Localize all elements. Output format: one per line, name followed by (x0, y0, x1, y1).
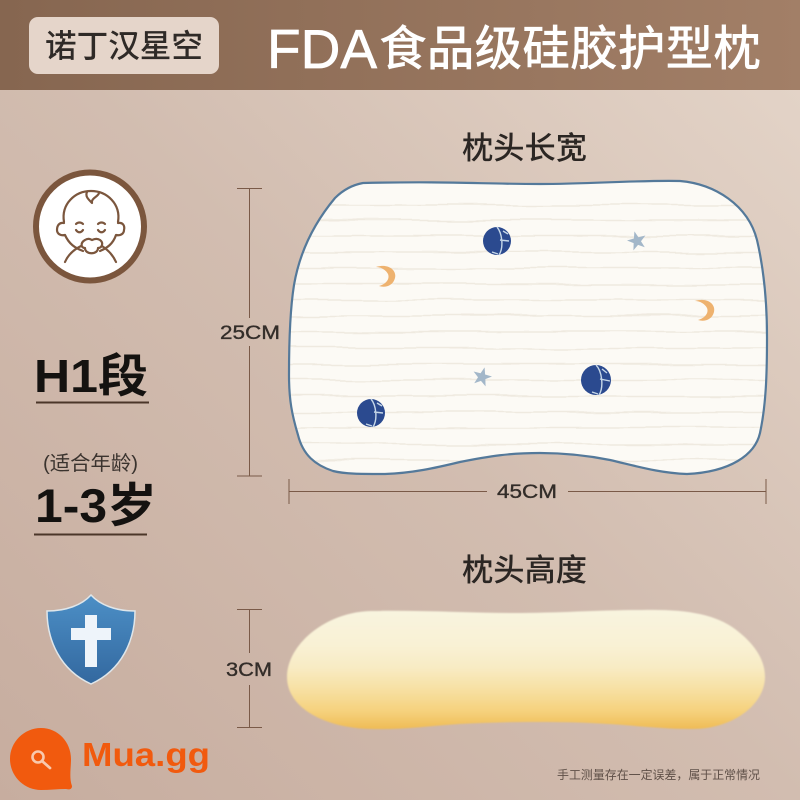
icon: blue cross shield (47, 595, 135, 684)
dimension: thickness 3CM (226, 610, 272, 728)
label: H1 stage: H1段 (34, 350, 148, 402)
title (267, 18, 761, 80)
quilting lines (280, 205, 775, 460)
dimension: thickness 3CM: 3CM (226, 660, 272, 681)
title: 食品级硅胶护型枕 (379, 23, 761, 76)
embroidery: planets (357, 227, 611, 427)
badge: collection name: 诺丁汉星空 (45, 28, 203, 64)
label: age range: 1-3岁 (35, 479, 157, 532)
watermark logo: Mua.gg (82, 736, 210, 773)
heading: pillow length and width: 枕头长宽 (462, 131, 587, 166)
silicone pillow side view (287, 610, 765, 729)
dimension: height 25CM: 25CM (220, 323, 280, 344)
header band (0, 0, 800, 90)
watermark logo (10, 728, 210, 790)
label: suitable age caption: (适合年龄) (43, 452, 138, 475)
embroidery: stars (471, 229, 648, 387)
dimension: width 45CM: 45CM (497, 482, 557, 503)
embroidery: moons (376, 266, 714, 321)
title: FDA (267, 18, 377, 80)
note: measurement disclaimer: 手工测量存在一定误差，属于正常情况 (557, 767, 760, 782)
pillow top view (280, 175, 775, 480)
icon: baby with pacifier (36, 172, 144, 280)
badge: collection name (29, 17, 219, 74)
dimension: height 25CM (220, 188, 280, 476)
heading: pillow height: 枕头高度 (462, 553, 587, 588)
dimension: width 45CM (289, 479, 766, 504)
